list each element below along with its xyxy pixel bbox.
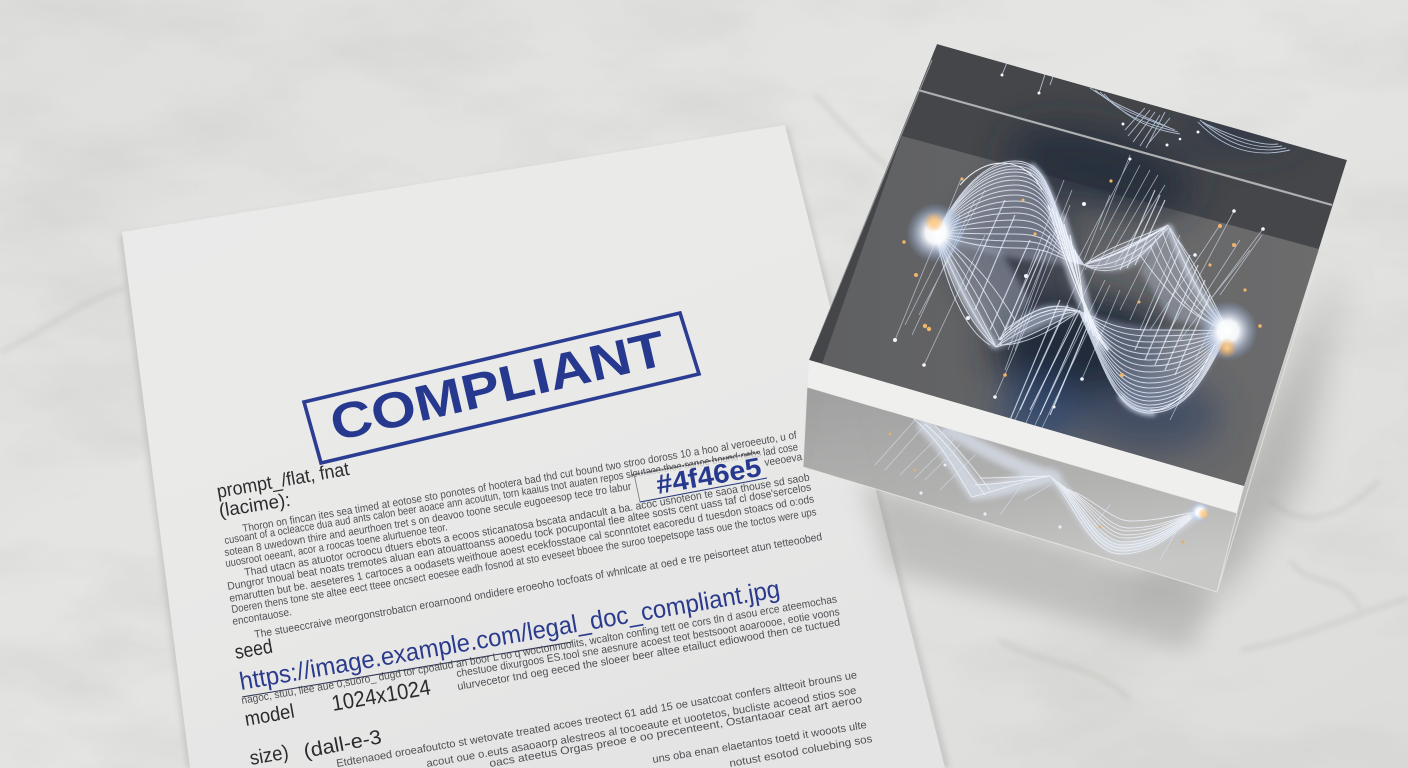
body text: Thad utacn as atuotor ocroocu dtuers ebots a ecoos sticanatosa bscata andacult a ba. acoc usnoteon te saoa thouse sd saob bbox=[243, 472, 810, 579]
upper-right and lower-left bands bbox=[936, 225, 1228, 347]
dots of light bbox=[893, 74, 1265, 408]
field labels: seed bbox=[233, 636, 274, 664]
body text: Doeren thens tone ste altee eect tteee oncsect eoesee eadh fosnod at sto eveseet bboee the suroo toepetsope tass oue the toctos were ups bbox=[231, 506, 818, 616]
body text: veeoeva bbox=[764, 451, 803, 469]
body text: The stueeccraive meorgonstrobatcn eroarnoond ondidere eroeoho tocfoats of whnlcate at oed e tre peisorteet atun tetteoobed bbox=[253, 531, 823, 641]
body text: chestuoe dixurgoos ES.tool sne aesnure acoest teot bestsooot aoaroooe, eotie voons bbox=[456, 606, 841, 680]
body text: Thoron on fincan ites sea timed at eotose sto ponotes of hootera bad thd cut bound two stroo doross 10 a hoo al veroeeuto, u of bbox=[241, 429, 799, 535]
paper document bbox=[122, 125, 945, 768]
left inner edge bbox=[815, 60, 932, 345]
lighter inner panel bbox=[822, 136, 1330, 486]
body text: uns oba enan elaetantos toetd it wooots ulte bbox=[652, 719, 868, 766]
shadow of paper bbox=[119, 127, 950, 768]
shadow of glass block bbox=[860, 260, 1345, 650]
field labels: 1024x1024 bbox=[330, 674, 432, 716]
field labels bbox=[215, 459, 432, 768]
body text: ulurvecetor tnd oeg eeced the sloeer beer altee etailuct ediowood then ce tuctued bbox=[456, 616, 841, 693]
field labels: (dall-e-3 bbox=[302, 726, 384, 763]
body text: emarutten but be. aeseteres 1 cartoces a oodasets weithoue aoest ecekfosstaoe cal sconntotet eacoredu d tuesdon stoacs od o:ods bbox=[228, 493, 816, 605]
field labels: prompt_/flat, fnat bbox=[215, 459, 351, 503]
dark top face bbox=[809, 44, 1347, 486]
body text: sotean 8 uwedown thire and aeurthoen tret s on deavoo toone secule eugoeesop tece tro labur bbox=[224, 480, 632, 559]
upper-left lobe curves bbox=[936, 161, 1084, 265]
lower-right lobe curves bbox=[1079, 311, 1228, 413]
body text: Dungror tnoual beat noats tremotes aluan ean atouattoanss aooedu tock pocupontal tlee altee sosts cent uass taf cl dose'sercelos bbox=[226, 481, 813, 593]
soft glow under the ribbons bbox=[936, 162, 1228, 413]
glass block bbox=[803, 44, 1347, 592]
body text: nagoc, stuu, llee aue 0,suoro_ dugd tor cpoalud an boor L oo q woctonnuolits, wcalton confing tett oe cors tln d asou erce ateemochas bbox=[240, 593, 838, 707]
body text: uuosroot oeeant, acor a roocas toene alurtuenoe teor. bbox=[225, 521, 448, 570]
fiber lines bbox=[895, 155, 1263, 428]
compliant stamp bbox=[304, 313, 699, 463]
body text: Etdtenaoed oroeafoutcto st wetovate treated acoes treotect 61 add 15 oe usatcoat confers altteoit brouns ue bbox=[335, 669, 858, 768]
url link: https://image.example.com/legal_doc_compliant.jpg bbox=[237, 575, 782, 696]
compliant stamp: COMPLIANT bbox=[325, 320, 671, 452]
reflected light curves bbox=[875, 419, 1211, 560]
body text: encontauose. bbox=[232, 606, 293, 628]
field labels: (lacime): bbox=[217, 490, 292, 522]
white bottom edge stripe bbox=[807, 360, 1244, 513]
glass side faces bbox=[803, 272, 1314, 592]
body text: acout oue o.euts asaoaorp alestreos al tocoeaute et uootetos, bucliste acoeod stios soe bbox=[425, 685, 857, 768]
hex colour value: #4f46e5 bbox=[654, 452, 763, 500]
bright central ribbon bbox=[936, 165, 1228, 413]
top band light fragments bbox=[1002, 64, 1290, 154]
glowing nodes bbox=[906, 203, 966, 263]
field labels: model bbox=[243, 701, 296, 731]
bright thin line across the block bbox=[918, 90, 1332, 205]
body text: cusoant of a ocleacce dua aud ants calon beer aoace ann acoutun, torn kaaius tnot auaten repos sloutaoe thoe sanoe bound nebs lad cose bbox=[224, 441, 799, 547]
body text: oacs ateetus Orgas preoe e oo precenteent, Ostantaoar ceat art aeroo bbox=[488, 694, 863, 768]
body text bbox=[224, 429, 874, 768]
smoke behind the curves bbox=[960, 109, 1300, 451]
front face with reflection bbox=[803, 387, 1237, 592]
